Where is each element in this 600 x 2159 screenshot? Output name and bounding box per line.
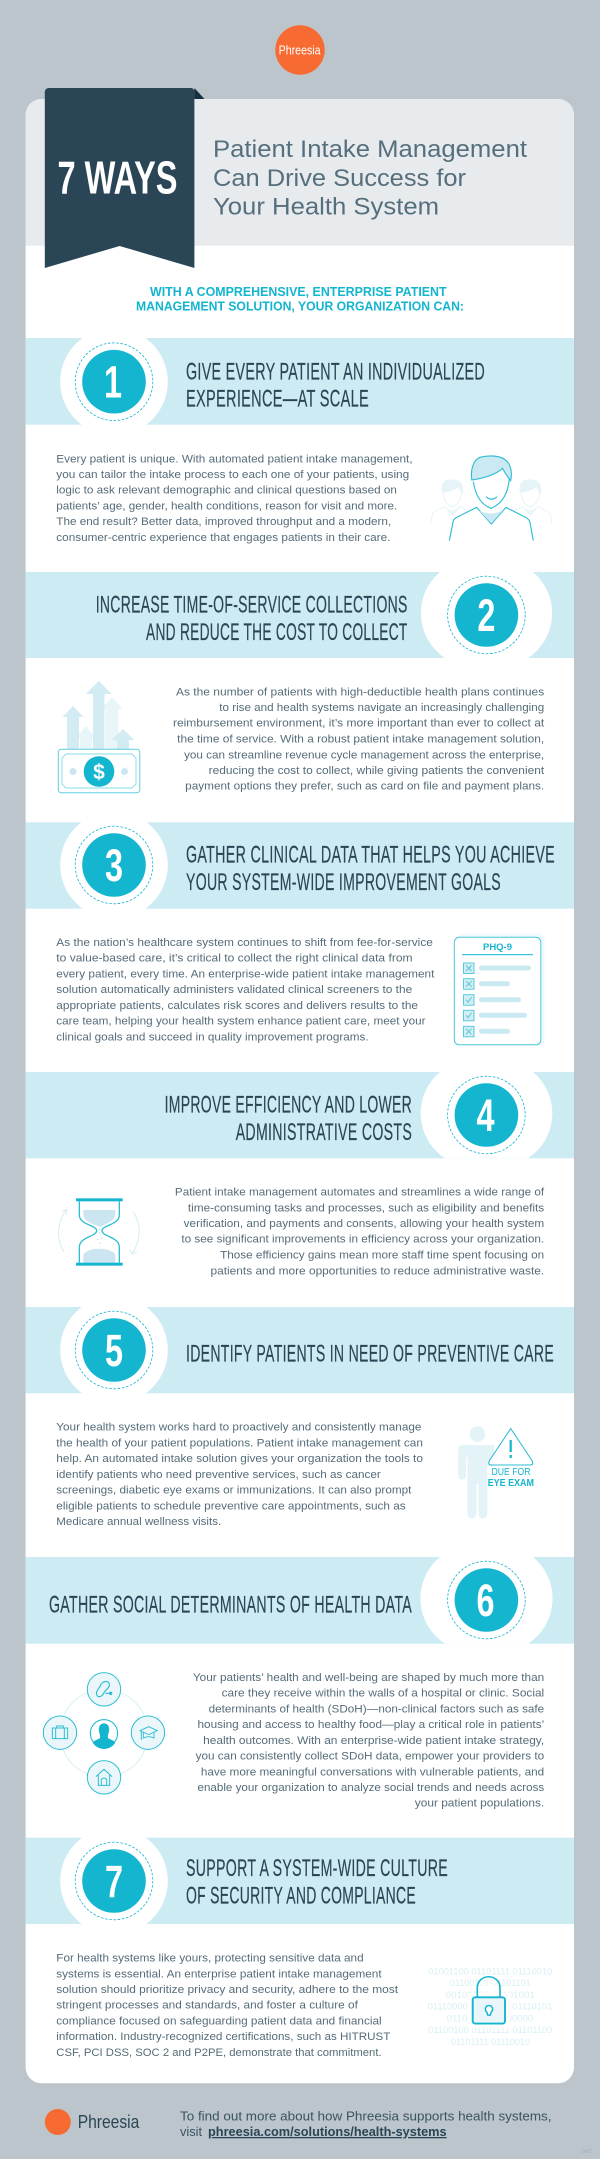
intro text: MANAGEMENT SOLUTION, YOUR ORGANIZATION CAN: bbox=[136, 299, 464, 313]
body text 4: Patient intake management automates and streamlines a wide range of bbox=[175, 1187, 545, 1199]
panel: section 7 bbox=[26, 1827, 574, 2059]
body text 3: to value-based care, it’s critical to collect the right clinical data from bbox=[56, 953, 413, 965]
body text 7: information. Industry-recognized certifications, such as HITRUST bbox=[56, 2031, 390, 2043]
body text 7: CSF, PCI DSS, SOC 2 and P2PE, demonstrate that commitment. bbox=[56, 2047, 382, 2059]
body text 6: health outcomes. With an enterprise-wide patient intake strategy, bbox=[203, 1735, 544, 1747]
body text 6: Your patients’ health and well-being are shaped by much more than bbox=[193, 1672, 544, 1684]
icon: lock over binary: 01100101 01101101 bbox=[450, 1978, 531, 1989]
body text 2: reducing the cost to collect, while giving patients the convenient bbox=[209, 765, 545, 777]
icon: patient due for eye exam bbox=[458, 1426, 534, 1518]
footer call to action: phreesia.com/solutions/health-systems bbox=[208, 2124, 447, 2139]
icon: PHQ-9 form bbox=[454, 934, 544, 1045]
body text 4: time-consuming tasks and processes, such as eligibility and benefits bbox=[188, 1202, 544, 1214]
heading 4: ADMINISTRATIVE COSTS bbox=[236, 1119, 412, 1146]
footer logo: Phreesia bbox=[78, 2112, 140, 2132]
banner 1 bbox=[26, 328, 574, 436]
banner 5: 5 bbox=[105, 1325, 123, 1376]
panel: section 2 bbox=[26, 572, 574, 793]
body text 3: As the nation’s healthcare system continues to shift from fee-for-service bbox=[56, 937, 433, 949]
stethoscope bbox=[87, 1673, 121, 1706]
body text 4: verification, and payments and consents, allowing your health system bbox=[184, 1218, 544, 1230]
icon: hourglass bbox=[58, 1198, 139, 1266]
body text 5 bbox=[56, 1422, 423, 1528]
person bbox=[90, 1720, 118, 1749]
icon: PHQ-9 form: PHQ-9 bbox=[483, 942, 512, 952]
icon: lock over binary: 01001100 01101111 01110010 bbox=[428, 1966, 552, 1977]
body text 1 bbox=[56, 453, 413, 544]
panel: footer bbox=[45, 2108, 593, 2155]
icon: money and rising arrows: $ bbox=[93, 761, 105, 784]
heading 4: IMPROVE EFFICIENCY AND LOWER bbox=[165, 1092, 412, 1119]
body text 3: clinical goals and succeed in quality improvement programs. bbox=[56, 1031, 369, 1043]
body text 2: you can streamline revenue cycle management across the enterprise, bbox=[184, 749, 544, 761]
title text bbox=[213, 136, 527, 220]
title text: Can Drive Success for bbox=[213, 165, 466, 192]
banner 7: 7 bbox=[105, 1856, 123, 1907]
heading 1 bbox=[186, 358, 485, 413]
heading 1: EXPERIENCE—AT SCALE bbox=[186, 386, 369, 413]
body text 7: compliance focused on safeguarding patient data and financial bbox=[56, 2015, 382, 2027]
body text 1: consumer-centric experience that engages patients in their care. bbox=[56, 532, 390, 544]
body text 4: patients and more opportunities to reduce administrative waste. bbox=[210, 1265, 544, 1277]
footer logo bbox=[45, 2109, 140, 2135]
intro text bbox=[136, 285, 464, 313]
banner 4 bbox=[26, 1072, 574, 1158]
ribbon bbox=[45, 88, 204, 268]
body text 2: As the number of patients with high-deductible health plans continues bbox=[176, 686, 545, 698]
body text 2 bbox=[173, 686, 545, 793]
icon: patients bbox=[430, 456, 552, 541]
body text 6 bbox=[193, 1672, 544, 1810]
banner 6: 6 bbox=[476, 1575, 494, 1626]
icon: lock over binary: 01100100 01101111 01101100 bbox=[428, 2025, 552, 2036]
title text: Patient Intake Management bbox=[213, 136, 527, 163]
body text 2: the time of service. With a robust patient intake management solution, bbox=[177, 733, 544, 745]
body text 5: screenings, diabetic eye exams or immunizations. It can also prompt bbox=[56, 1485, 412, 1497]
body text 3: every patient, every time. An enterprise-wide patient intake management bbox=[56, 968, 435, 980]
body text 6: housing and access to healthy food—play a critical role in patients’ bbox=[198, 1719, 544, 1731]
body text 5: identify patients who need preventive services, such as cancer bbox=[56, 1469, 381, 1481]
body text 6: determinants of health (SDoH)—non-clinical factors such as safe bbox=[209, 1703, 544, 1715]
body text 3: solution automatically administers validated clinical screeners to the bbox=[56, 984, 412, 996]
body text 1: Every patient is unique. With automated patient intake management, bbox=[56, 453, 413, 465]
footer call to action: visit bbox=[180, 2124, 202, 2139]
icon: lock over binary: 01110000 01110011 01110101 bbox=[428, 2002, 552, 2013]
document code: 0421 bbox=[582, 2149, 593, 2155]
heading 3 bbox=[186, 842, 555, 896]
body text 7: systems is essential. An enterprise patient intake management bbox=[56, 1968, 382, 1980]
body text 5: Your health system works hard to proactively and consistently manage bbox=[56, 1422, 421, 1434]
body text 2: payment options they prefer, such as card on file and payment plans. bbox=[185, 781, 544, 793]
heading 2: AND REDUCE THE COST TO COLLECT bbox=[146, 619, 408, 646]
banner 3: 3 bbox=[105, 840, 123, 891]
body text 6: enable your organization to analyze social trends and needs across bbox=[198, 1782, 544, 1794]
icon: social determinants bbox=[43, 1673, 165, 1794]
banner 7 bbox=[26, 1827, 574, 1935]
ribbon: 7 WAYS bbox=[58, 151, 178, 203]
icon: lock over binary: 01101101 00100000 bbox=[447, 2013, 533, 2024]
icon: lock over binary: 00100000 01101001 bbox=[446, 1990, 535, 2001]
body text 7 bbox=[56, 1953, 399, 2059]
panel: section 5 bbox=[26, 1296, 574, 1528]
body text 3: care team, helping your health system enhance patient care, meet your bbox=[56, 1016, 426, 1028]
body text 1: The end result? Better data, improved throughput and a modern, bbox=[56, 516, 391, 528]
panel: section 3 bbox=[26, 811, 574, 1045]
body text 6: care they receive within the walls of a hospital or clinic. Social bbox=[222, 1688, 544, 1700]
body text 1: logic to ask relevant demographic and clinical questions based on bbox=[56, 485, 397, 497]
body text 5: help. An automated intake solution gives your organization the tools to bbox=[56, 1453, 423, 1465]
body text 5: eligible patients to schedule preventive care appointments, such as bbox=[56, 1500, 406, 1512]
icon: patient due for eye exam: EYE EXAM bbox=[488, 1478, 534, 1489]
intro text: WITH A COMPREHENSIVE, ENTERPRISE PATIENT bbox=[150, 285, 447, 299]
body text 3: appropriate patients, calculates risk scores and delivers results to the bbox=[56, 1000, 418, 1012]
banner 6 bbox=[26, 1557, 574, 1644]
title text: Your Health System bbox=[213, 194, 439, 220]
body text 4: Those efficiency gains mean more staff time spent focusing on bbox=[220, 1250, 544, 1262]
body text 5: the health of your patient populations. Patient intake management can bbox=[56, 1437, 423, 1449]
body text 6: your patient populations. bbox=[415, 1798, 544, 1810]
briefcase bbox=[43, 1716, 77, 1749]
banner 1: 1 bbox=[104, 356, 122, 407]
heading 7 bbox=[186, 1855, 448, 1909]
body text 1: you can tailor the intake process to each one of your patients, using bbox=[56, 469, 409, 481]
panel: section 6 bbox=[26, 1557, 574, 1810]
icon: patient due for eye exam: DUE FOR bbox=[492, 1467, 530, 1478]
body text 7: For health systems like yours, protecting sensitive data and bbox=[56, 1953, 364, 1965]
footer call to action bbox=[180, 2108, 552, 2139]
banner 3 bbox=[26, 811, 574, 919]
icon: lock over binary: 01101111 01110010 bbox=[451, 2037, 530, 2048]
panel: header bbox=[26, 88, 574, 268]
heading 4 bbox=[165, 1092, 412, 1146]
body text 6: you can consistently collect SDoH data, empower your providers to bbox=[196, 1751, 544, 1763]
logo badge bbox=[275, 25, 325, 75]
body text 1: patients’ age, gender, health conditions, reason for visit and more. bbox=[56, 500, 397, 512]
panel: section 4 bbox=[26, 1072, 574, 1277]
banner 4: 4 bbox=[476, 1090, 494, 1141]
body text 5: Medicare annual wellness visits. bbox=[56, 1516, 221, 1528]
body text 3 bbox=[56, 937, 435, 1043]
heading 7: OF SECURITY AND COMPLIANCE bbox=[186, 1882, 416, 1909]
icon: money and rising arrows bbox=[58, 681, 140, 793]
banner 2: 2 bbox=[477, 590, 495, 641]
footer call to action: To find out more about how Phreesia supports health systems, bbox=[180, 2108, 552, 2123]
logo badge: Phreesia bbox=[279, 42, 321, 58]
body text 2: to rise and health systems navigate an increasingly challenging bbox=[219, 702, 544, 714]
panel: section 1 bbox=[26, 328, 574, 544]
body text 7: solution should prioritize privacy and security, adhere to the most bbox=[56, 1984, 399, 1996]
body text 7: stringent processes and standards, and foster a culture of bbox=[56, 2000, 359, 2012]
body text 2: reimbursement environment, it’s more important than ever to collect at bbox=[173, 718, 545, 730]
body text 4 bbox=[175, 1187, 545, 1277]
body text 6: have more meaningful conversations with vulnerable patients, and bbox=[201, 1766, 544, 1778]
icon: lock over binary bbox=[428, 1966, 552, 2048]
banner 5 bbox=[26, 1296, 574, 1404]
heading 2 bbox=[96, 592, 408, 646]
house bbox=[87, 1761, 121, 1794]
graduation cap bbox=[131, 1716, 165, 1749]
body text 4: to see significant improvements in efficiency across your organization. bbox=[181, 1234, 544, 1246]
banner 2 bbox=[26, 572, 574, 658]
